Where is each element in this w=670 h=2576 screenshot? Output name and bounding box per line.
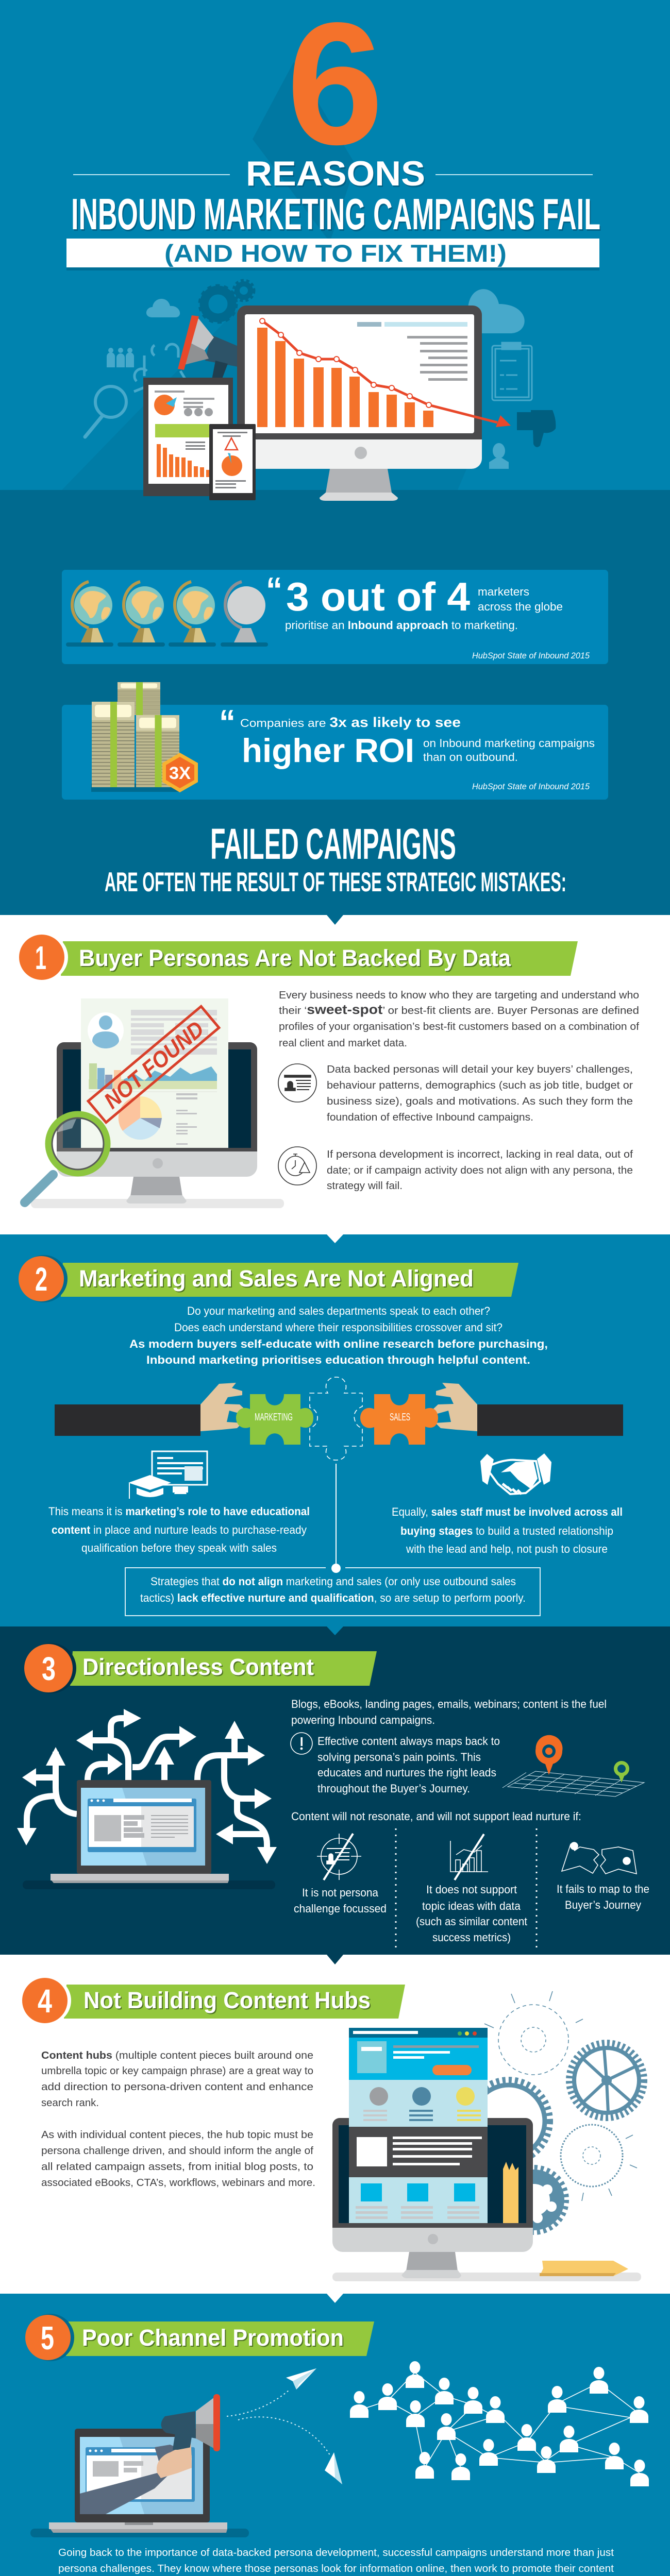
background: dark blue stats panel (0, 490, 670, 915)
icon: exclamation circle (291, 1733, 312, 1754)
section 1 heading: 1 (35, 939, 46, 976)
icon: clipboard right of monitor (492, 343, 532, 400)
stat headline: 3 out of 4 (286, 574, 470, 619)
arrow: into section 3 (327, 1626, 343, 1635)
sales puzzle piece (360, 1394, 438, 1445)
text: marketing role: content in place and nurture leads to purchase-ready (52, 1523, 307, 1536)
persona document (81, 998, 228, 1148)
panel: higher ROI stat: on Inbound marketing campaigns (423, 737, 595, 750)
monitor with falling bar chart (237, 306, 511, 501)
text: sales role: with the lead and help, not push to closure (406, 1543, 608, 1555)
arrow: into section 1 (327, 915, 343, 925)
stamp: not found: NOT FOUND (99, 1016, 209, 1114)
text: content hubs: add direction to persona-driven content and enhance (41, 2081, 313, 2093)
panel: section 2 background (0, 1234, 670, 1626)
text: not persona focussed: challenge focussed (294, 1902, 387, 1915)
section 5 heading: 5 (41, 2319, 54, 2357)
stat text: Companies are 3x as likely to see (240, 715, 461, 730)
source: HubSpot State of Inbound 2015 (472, 782, 590, 791)
text: sales role: Equally, sales staff must be involved across all (392, 1505, 623, 1518)
quote mark: “ (266, 570, 282, 609)
panel: section 5 background (0, 2294, 670, 2576)
text: persona development warning: strategy will fail. (327, 1180, 403, 1192)
text: buyer personas intro: their ‘sweet-spot ’ or best-fit clients are. Buyer Personas are defined (279, 1002, 639, 1017)
text: data backed personas: behaviour patterns, demographics (such as job title, budget or (327, 1079, 633, 1091)
dotted flight paths (227, 2391, 330, 2455)
section 1 heading (19, 934, 578, 981)
dashed missing piece (310, 1377, 362, 1460)
text: content hubs: Content hubs (multiple content pieces built around one (41, 2049, 313, 2061)
text: effective content (317, 1735, 500, 1795)
section 2 heading: Marketing and Sales Are Not Aligned (79, 1265, 474, 1292)
section 4 heading: 4 (38, 1982, 52, 2020)
section 2 heading (19, 1255, 518, 1302)
section 5 heading (25, 2314, 374, 2361)
long shadow behind monitor (62, 309, 482, 490)
text: no data support: topic ideas with data (422, 1900, 521, 1912)
text: content hubs: As with individual content pieces, the hub topic must be (41, 2129, 313, 2141)
dashed gears and rays (484, 1991, 637, 2201)
text: buyer personas intro: profiles of your organisation’s best-fit customers based on a combination of (279, 1021, 639, 1032)
callout: strategies that do not align (125, 1564, 540, 1616)
title: reasons: REASONS (246, 154, 425, 193)
text: section 2 intro: Inbound marketing prioritises education through helpful content. (146, 1353, 530, 1366)
icon: megaphone (178, 315, 238, 385)
left sleeve and hand (55, 1404, 200, 1436)
stat headline: higher ROI (242, 732, 414, 769)
chart trend line (262, 321, 497, 422)
dotted dividers (396, 1828, 537, 1948)
section 4 heading (22, 1977, 405, 2024)
text: content hubs: persona challenge driven, and should inform the angle of (41, 2145, 313, 2157)
icon: education screen (128, 1451, 207, 1499)
page columns (349, 2177, 488, 2223)
connector line to callout (336, 1464, 337, 1564)
text: section 2 intro: Do your marketing and sales departments speak to each other? (187, 1304, 490, 1317)
text: marketing role (48, 1505, 310, 1554)
page people row (349, 2080, 488, 2127)
arrow: into section 2 (327, 1234, 343, 1243)
laptop (23, 1880, 275, 1889)
illustration: gears behind monitor (468, 1991, 644, 2231)
callout: strategies that do not align: tactics) lack effective nurture and qualification, so are setup to perform poorly. (140, 1591, 526, 1604)
text: data backed personas (327, 1063, 633, 1123)
icon: money stacks with 3X badge (91, 682, 198, 792)
icon: business person (489, 443, 509, 469)
pencils in screen (503, 2162, 518, 2223)
text: content hubs (41, 2049, 315, 2189)
text: sales role (392, 1505, 623, 1555)
icon: handshake (480, 1453, 551, 1494)
page dark block (349, 2127, 488, 2177)
panel: section 1 background (0, 915, 670, 1234)
text: section 2 intro: Does each understand where their responsibilities crossover and sit? (174, 1321, 502, 1334)
text: content hubs: search rank. (41, 2097, 99, 2109)
marketing puzzle piece (236, 1394, 313, 1445)
illustration: hands holding puzzle pieces: SALES (390, 1412, 410, 1423)
stat text: prioritise an Inbound approach to marketing. (285, 619, 518, 632)
text: fails buyer journey (557, 1883, 649, 1911)
icon: money stacks with 3X badge: 3X (169, 764, 191, 783)
text: section 2 intro (129, 1304, 548, 1366)
text: effective content: throughout the Buyer’s Journey. (317, 1782, 470, 1795)
text: persona development warning: If persona development is incorrect, lacking in real data, out of (327, 1148, 633, 1160)
section 2 heading: 2 (35, 1261, 47, 1298)
phone (209, 424, 256, 500)
chart bars (257, 328, 433, 427)
subtitle banner (66, 239, 599, 270)
illustration: hands holding puzzle pieces (55, 1377, 623, 1460)
illustration: laptop with megaphone and paper planes (30, 2368, 342, 2537)
text: content hubs: all related campaign assets, from initial blog posts, to (41, 2161, 313, 2173)
page header (349, 2028, 488, 2038)
illustration: hands holding puzzle pieces: MARKETING (255, 1412, 293, 1423)
text: section 2 intro: As modern buyers self-educate with online research before purchasing, (129, 1337, 548, 1350)
section 1 heading: Buyer Personas Are Not Backed By Data (79, 945, 511, 971)
quote mark: “ (219, 703, 236, 742)
pencil on desk (540, 2261, 628, 2276)
icon: thumbs down (517, 410, 556, 447)
text: content hubs: umbrella topic or key campaign phrase) are a great way to (41, 2065, 313, 2077)
source: HubSpot State of Inbound 2015 (472, 651, 590, 660)
text: sales role: buying stages to build a trusted relationship (400, 1524, 613, 1537)
icon: torn map (562, 1842, 636, 1874)
text: fails buyer journey: It fails to map to the (557, 1883, 649, 1895)
icon: map with location pins (502, 1735, 644, 1797)
text: data backed personas: Data backed personas will detail your key buyers’ challenges, (327, 1063, 633, 1075)
text: content as fuel (291, 1698, 607, 1726)
text: content will not resonate: Content will not resonate, and will not support lead nurture if: (291, 1810, 581, 1823)
subtitle banner: (AND HOW TO FIX THEM!) (164, 240, 507, 267)
right sleeve and hand (477, 1404, 623, 1436)
icon: magnifying glass (25, 1115, 107, 1202)
panel: 3 out of 4 stat: across the globe (478, 600, 563, 613)
illustration: arrows branching from laptop (17, 1709, 277, 1889)
icon: crossed out persona target (317, 1834, 361, 1880)
icon: crossed out data chart (450, 1834, 488, 1880)
icon: stopwatch warning circle (278, 1147, 316, 1185)
illustration: persona not found on monitor (25, 998, 284, 1208)
paper planes (286, 2368, 316, 2389)
text: content as fuel: powering Inbound campaigns. (291, 1714, 435, 1726)
text: no data support: (such as similar content (416, 1915, 527, 1928)
tablet (143, 378, 233, 496)
text: marketing role: qualification before they speak with sales (81, 1541, 277, 1554)
text: effective content: educates and nurtures the right leads (317, 1766, 496, 1779)
panel: section 4 background (0, 1955, 670, 2294)
callout: strategies that do not align: Strategies that do not align marketing and sales (or only use outbound sales (150, 1575, 516, 1588)
panel: higher ROI stat (62, 682, 608, 800)
solid gears (468, 2043, 644, 2231)
text: not persona focussed (294, 1886, 387, 1915)
icons: clouds and gears behind monitor (146, 280, 525, 333)
text: not persona focussed: It is not persona (302, 1886, 379, 1899)
section 3 heading: 3 (42, 1650, 56, 1687)
icon: profile circle (278, 1064, 316, 1102)
text: effective content: solving persona’s pain points. This (317, 1751, 481, 1764)
text: fails buyer journey: Buyer’s Journey (565, 1899, 641, 1911)
megaphone (161, 2411, 196, 2438)
text: data backed personas: business size), goals and motivations. As such they form the (327, 1095, 633, 1107)
text: channel promotion: persona challenges. They know where those personas look for information online, then work to promote their content (58, 2563, 614, 2574)
text: buyer personas intro: Every business needs to know who they are targeting and understand who (279, 989, 639, 1001)
icons: people, puzzle and magnifier left of monitor (85, 344, 193, 437)
panel: 3 out of 4 stat: marketers (478, 585, 529, 598)
section 5 heading: Poor Channel Promotion (82, 2325, 344, 2351)
text: channel promotion (58, 2547, 614, 2576)
text: marketing role: This means it is marketing’s role to have educational (48, 1505, 310, 1518)
title: big number 6 (253, 0, 383, 242)
icon: four globes (66, 582, 268, 647)
illustration: monitor with landing page (332, 2028, 641, 2281)
section 4 heading: Not Building Content Hubs (83, 1987, 371, 2013)
text: effective content: Effective content always maps back to (317, 1735, 500, 1748)
illustration: people network (350, 2361, 649, 2486)
text: content as fuel: Blogs, eBooks, landing pages, emails, webinars; content is the fuel (291, 1698, 607, 1710)
text: buyer personas intro (279, 989, 639, 1049)
text: data backed personas: foundation of effective Inbound campaigns. (327, 1111, 533, 1123)
section 3 heading: Directionless Content (82, 1654, 314, 1680)
panel: 3 out of 4 stat (62, 570, 608, 664)
arrow: into section 4 (327, 1955, 343, 1964)
background: top blue panel (0, 0, 670, 490)
text: persona development warning (327, 1148, 633, 1192)
text: channel promotion: Going back to the importance of data-backed persona development, successful campaigns understand more than just (58, 2547, 614, 2558)
text: no data support: success metrics) (432, 1931, 511, 1944)
text: no data support (416, 1883, 527, 1944)
text: content hubs: associated eBooks, CTA’s, workflows, webinars and more. (41, 2177, 315, 2189)
text: no data support: It does not support (426, 1883, 517, 1896)
text: persona development warning: date; or if campaign activity does not align with any persona, the (327, 1164, 633, 1176)
panel: section 3 background (0, 1626, 670, 1955)
panel: higher ROI stat: than on outbound. (423, 751, 518, 764)
arrow: into section 5 (327, 2294, 343, 2303)
text: buyer personas intro: real client and market data. (279, 1037, 407, 1049)
chart legend (357, 322, 381, 327)
heading: failed campaigns: FAILED CAMPAIGNS (210, 820, 456, 868)
page hero (349, 2038, 488, 2080)
section 3 heading (24, 1643, 377, 1693)
